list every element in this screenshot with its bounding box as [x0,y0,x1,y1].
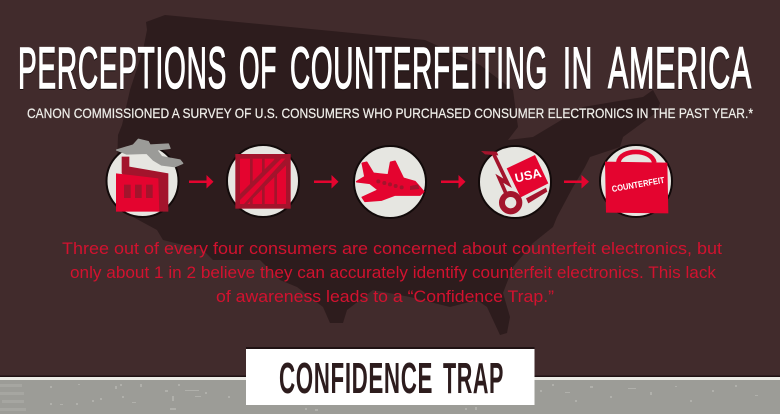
icon: counterfeit bag: COUNTERFEIT [611,175,666,194]
heading banner: confidence trap: CONFIDENCE [279,354,433,403]
arrow 2 [314,175,338,188]
intro paragraph: Three out of every four consumers are concerned about counterfeit electronics, but [62,239,722,258]
title: OF [239,36,277,101]
icon: airplane [354,146,426,218]
title [18,36,752,101]
title: IN [563,36,593,101]
icon: counterfeit bag [600,145,672,217]
arrow 3 [441,175,466,188]
intro paragraph: of awareness leads to a “Confidence Trap.” [216,287,554,306]
title: PERCEPTIONS [18,36,227,101]
icon: hand truck with USA box: USA [514,166,543,185]
heading banner: confidence trap [246,347,534,405]
grey footer band [0,376,780,414]
process row of icons and arrows [106,139,672,218]
background: map of the United States [117,15,660,335]
icon: hand truck with USA box [479,146,551,218]
arrow 4 [564,175,589,188]
icon: factory [106,139,183,217]
icon: shipping crate [227,145,299,217]
arrow 1 [189,175,214,188]
heading banner: confidence trap: TRAP [443,354,504,403]
intro paragraph [62,239,722,306]
intro paragraph: only about 1 in 2 believe they can accurately identify counterfeit electronics. This lack [70,263,716,282]
